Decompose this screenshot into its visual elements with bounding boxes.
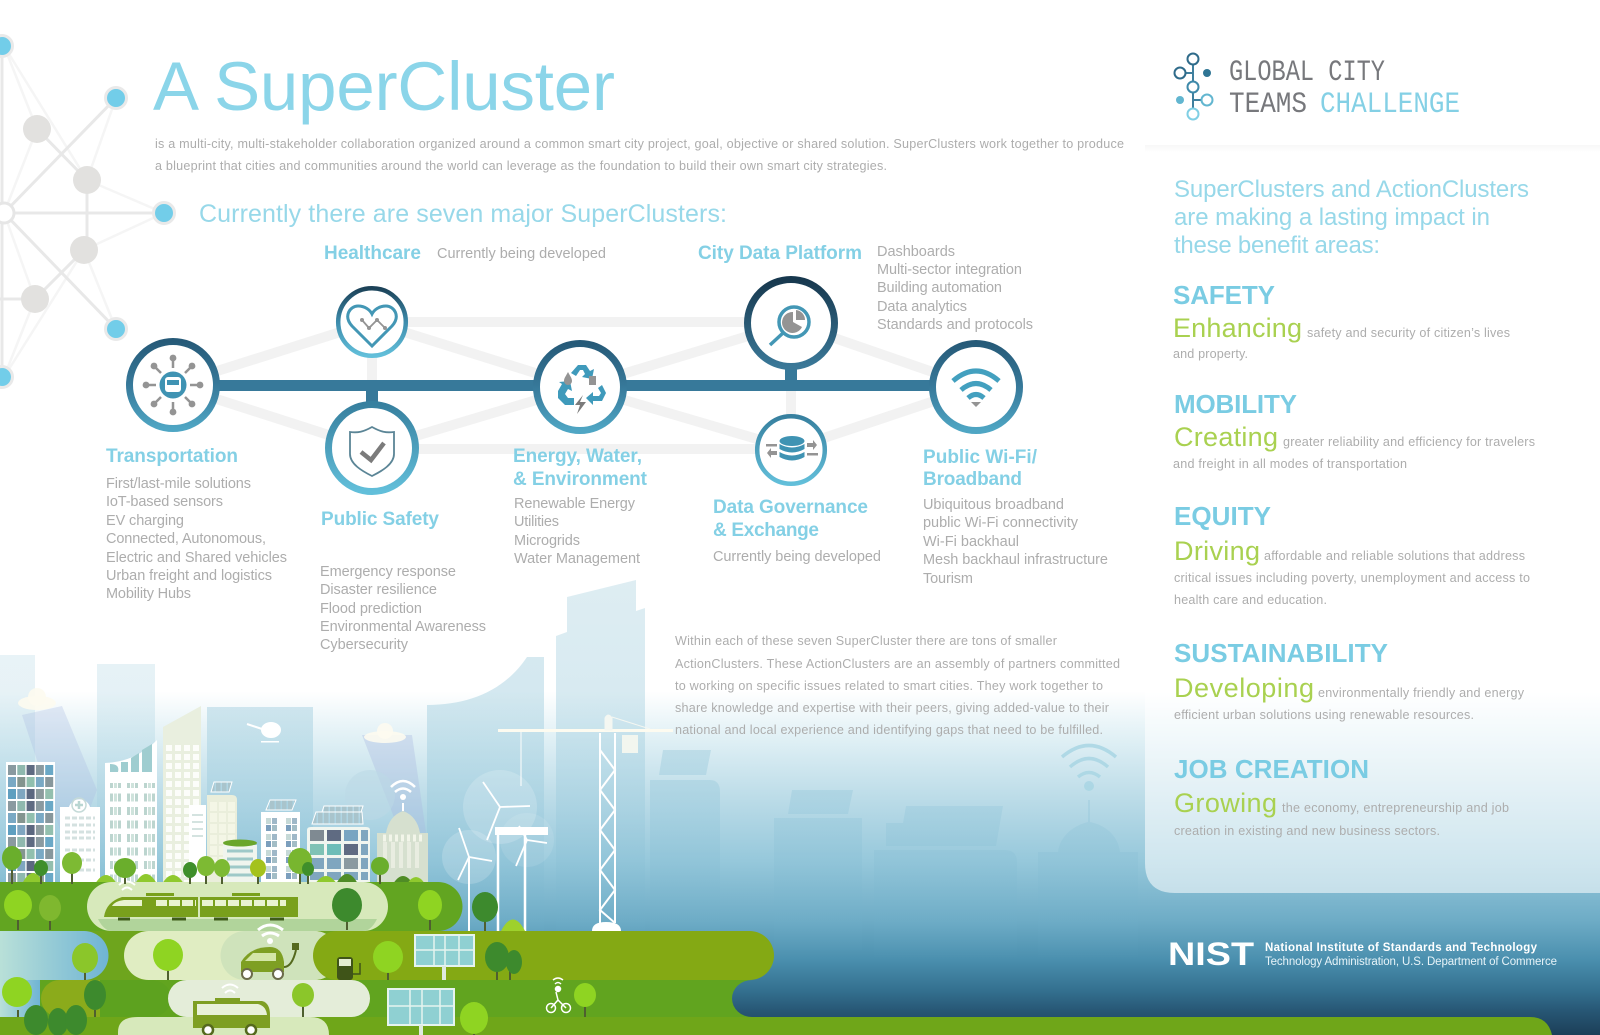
benefit: job creation: JOB CREATION (1174, 754, 1369, 784)
logo: global city teams challenge: GLOBAL CITY (1229, 56, 1385, 90)
icon: solar panel upper (415, 935, 474, 980)
green terraces (0, 882, 1552, 1035)
label: public wi-fi: Broadband (923, 469, 1022, 490)
logo: NIST: Technology Administration, U.S. Department of Commerce (1265, 956, 1557, 968)
node: public safety (328, 404, 416, 492)
label: energy, water and environment: Water Management (514, 551, 640, 567)
background links (173, 322, 976, 449)
intro paragraph (155, 137, 1124, 173)
mid beige block (207, 782, 237, 884)
label: public safety: Disaster resilience (320, 582, 437, 598)
terrace row 4 (0, 1017, 1552, 1035)
label: healthcare (324, 243, 606, 264)
label: city data platform: Building automation (877, 280, 1002, 296)
label: public wi-fi: Ubiquitous broadband (923, 497, 1064, 513)
subheading: Currently there are seven major SuperClusters: (199, 200, 727, 228)
actionclusters paragraph (675, 634, 1120, 737)
city buildings (6, 688, 430, 884)
benefit: job creation (1174, 754, 1509, 838)
label: public wi-fi (923, 447, 1108, 587)
logo: global city teams challenge (1174, 54, 1460, 122)
crane (498, 715, 673, 931)
label: energy, water and environment: Energy, Water, (513, 446, 642, 467)
icon: faded wifi over capitol (1062, 746, 1116, 791)
white block (261, 800, 300, 884)
benefit: sustainability: environmentally friendly and energy (1318, 686, 1525, 700)
spotlight beams and clouds (18, 688, 430, 860)
label: city data platform (698, 243, 1033, 333)
label: public safety: Flood prediction (320, 601, 422, 617)
hospital (60, 798, 100, 884)
icon: wifi above train (119, 882, 135, 890)
benefit: mobility: Creating (1174, 422, 1278, 452)
benefit: sustainability: Developing (1174, 673, 1314, 703)
panel heading: are making a lasting impact in (1174, 204, 1490, 231)
icon: car with charging plug (241, 925, 299, 979)
label: data governance: & Exchange (713, 520, 819, 541)
benefit: mobility: greater reliability and efficiency for travelers (1283, 435, 1535, 449)
benefit: equity: affordable and reliable solutions that address (1264, 549, 1525, 563)
vehicles and street objects (104, 882, 570, 1035)
icon: solar panel lower (388, 989, 454, 1035)
solar colored block (307, 806, 370, 884)
label: transportation (106, 446, 287, 602)
benefit: equity: EQUITY (1174, 501, 1271, 531)
label: energy, water and environment: Renewable Energy (514, 496, 636, 512)
label: city data platform: City Data Platform (698, 243, 862, 264)
node: energy, water and environment (536, 344, 624, 430)
label: city data platform: Dashboards (877, 244, 955, 260)
icon: cyclist (546, 978, 570, 1012)
label: public safety (320, 509, 486, 653)
label: public wi-fi: public Wi-Fi connectivity (923, 515, 1079, 531)
label: data governance: Currently being developed (713, 549, 881, 565)
benefit: job creation: creation in existing and new business sectors. (1174, 824, 1440, 838)
beige tower (163, 706, 206, 884)
label: transportation: EV charging (106, 513, 184, 529)
label: data governance (713, 497, 881, 565)
icon: bus (193, 984, 270, 1035)
actionclusters paragraph: share knowledge and expertise with their peers, giving added-value to their (675, 701, 1109, 715)
benefit: sustainability: efficient urban solutions using renewable resources. (1174, 708, 1474, 722)
benefit: safety: Enhancing (1173, 313, 1302, 343)
title: A SuperCluster (153, 48, 615, 125)
label: data governance: Data Governance (713, 497, 868, 518)
benefit: safety: and property. (1173, 347, 1248, 361)
terrace row 3 (0, 980, 760, 1017)
label: transportation: IoT-based sensors (106, 494, 223, 510)
benefit: mobility: MOBILITY (1174, 389, 1297, 419)
intro paragraph: a blueprint that cities and communities around the world can leverage as the foundation to build their own smart city strategies. (155, 159, 887, 173)
benefit: job creation: Growing (1174, 788, 1277, 818)
logo: global city teams challenge: TEAMS (1229, 88, 1307, 122)
label: public safety: Public Safety (321, 509, 439, 530)
label: city data platform: Multi-sector integration (877, 262, 1022, 278)
logo: NIST: National Institute of Standards and Technology (1265, 942, 1538, 954)
benefit: safety (1173, 280, 1510, 361)
label: energy, water and environment: Microgrids (514, 533, 580, 549)
label: city data platform: Data analytics (877, 299, 967, 315)
benefit: equity: Driving (1174, 536, 1260, 566)
label: city data platform: Standards and protocols (877, 317, 1033, 333)
label: transportation: Electric and Shared vehicles (106, 550, 287, 566)
label: energy, water and environment: Utilities (514, 514, 559, 530)
label: energy, water and environment: & Environment (513, 469, 648, 490)
label: transportation: First/last-mile solutions (106, 476, 251, 492)
label: public wi-fi: Tourism (923, 571, 973, 587)
benefit: mobility (1173, 389, 1535, 471)
benefit: sustainability (1174, 638, 1525, 722)
benefit: equity (1174, 501, 1530, 607)
label: public wi-fi: Public Wi-Fi/ (923, 447, 1038, 468)
benefit: equity: health care and education. (1174, 593, 1327, 607)
node: healthcare (338, 288, 406, 356)
terrace row 1 (0, 882, 462, 931)
actionclusters paragraph: to working on specific issues related to smart cities. They work together to (675, 679, 1103, 693)
bushes on ground line (22, 873, 525, 1017)
notch of dark water (732, 980, 762, 1017)
network node cluster (0, 36, 174, 388)
node: transportation (130, 342, 216, 428)
benefit: job creation: the economy, entrepreneurship and job (1282, 801, 1509, 815)
benefit: safety: safety and security of citizen’s lives (1307, 326, 1510, 340)
benefit: safety: SAFETY (1173, 280, 1275, 310)
label: healthcare: Healthcare (324, 243, 421, 264)
node: city data platform (748, 280, 834, 366)
wind turbines (442, 770, 554, 931)
label: public wi-fi: Wi-Fi backhaul (923, 534, 1019, 550)
node: public wi-fi (932, 344, 1020, 430)
background sky gradient (0, 640, 1600, 1035)
label: public safety: Environmental Awareness (320, 619, 486, 635)
label: transportation: Mobility Hubs (106, 586, 191, 602)
label: transportation: Connected, Autonomous, (106, 531, 266, 547)
colored tower (6, 762, 55, 884)
benefit: equity: critical issues including poverty, unemployment and access to (1174, 571, 1530, 585)
intro paragraph: is a multi-city, multi-stakeholder collaboration organized around a common smart city project, goal, objective or shared solution. SuperClusters work together to produce (155, 137, 1124, 151)
node: data governance (757, 416, 825, 484)
terrace row 2 (0, 931, 774, 980)
actionclusters paragraph: Within each of these seven SuperCluster there are tons of smaller (675, 634, 1057, 648)
label: energy, water and environment (513, 446, 648, 567)
logo: NIST: NIST (1168, 936, 1255, 972)
panel heading (1174, 176, 1529, 259)
skyline silhouettes (0, 580, 1138, 960)
label: transportation: Urban freight and logistics (106, 568, 272, 584)
label: public safety: Emergency response (320, 564, 456, 580)
actionclusters paragraph: national and local experience and identifying gaps that need to be fulfilled. (675, 723, 1103, 737)
benefit: sustainability: SUSTAINABILITY (1174, 638, 1388, 668)
curved tower (105, 740, 157, 884)
logo: NIST (1168, 936, 1557, 972)
label: healthcare: Currently being developed (437, 246, 606, 262)
label: transportation: Transportation (106, 446, 238, 467)
panel heading: these benefit areas: (1174, 232, 1380, 259)
panel heading: SuperClusters and ActionClusters (1174, 176, 1529, 203)
main connector bar (215, 360, 935, 405)
capitol building (377, 781, 428, 884)
green-roof block (223, 840, 257, 884)
benefit: mobility: and freight in all modes of transportation (1173, 457, 1407, 471)
icon: train (104, 893, 298, 919)
logo: global city teams challenge: CHALLENGE (1320, 88, 1460, 122)
right panel (1145, 145, 1600, 893)
actionclusters paragraph: ActionClusters. These ActionClusters are an assembly of partners committed (675, 657, 1120, 671)
hub diagram (130, 280, 1020, 492)
trees (2, 846, 596, 1035)
label: public wi-fi: Mesh backhaul infrastructure (923, 552, 1108, 568)
icon: charging station (337, 957, 360, 980)
label: public safety: Cybersecurity (320, 637, 409, 653)
